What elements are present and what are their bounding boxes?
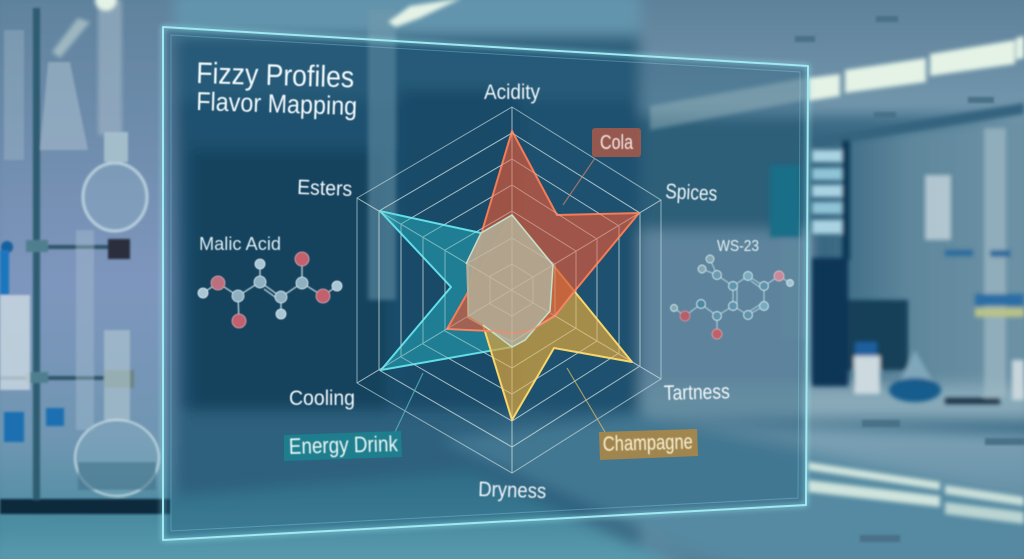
callout: energy drink: [284, 373, 423, 461]
callout: cola: [563, 128, 641, 205]
series: cola: [447, 131, 639, 333]
series overlap: [466, 215, 553, 347]
axis labels: Spices: [665, 180, 718, 206]
axis labels: Esters: [297, 176, 353, 201]
axis labels: Acidity: [484, 81, 540, 104]
axis labels: [289, 81, 730, 503]
radar chart: [357, 107, 661, 473]
axis labels: Cooling: [289, 387, 355, 410]
title: Fizzy Profiles: [196, 57, 355, 94]
chart grid: [357, 107, 661, 473]
callout: champagne: Champagne: [603, 431, 693, 456]
callout: champagne: [567, 368, 698, 460]
cabinet handles: [795, 16, 1024, 542]
molecule: WS-23: WS-23: [717, 238, 759, 255]
title: [196, 57, 358, 121]
molecule: malic acid: [198, 234, 342, 328]
title: Flavor Mapping: [196, 86, 358, 121]
molecule: WS-23: [670, 238, 794, 339]
callout: energy drink: Energy Drink: [288, 431, 399, 459]
molecule: malic acid: Malic Acid: [199, 234, 281, 254]
axis labels: Dryness: [478, 478, 547, 503]
background: lab stand and glassware: [0, 8, 170, 514]
series: energy drink: [380, 211, 553, 370]
series: champagne: [468, 215, 632, 420]
blurred columns and dark shapes: [98, 0, 1024, 404]
axis labels: Tartness: [664, 380, 730, 405]
callout: cola: Cola: [600, 132, 634, 154]
panel: glass panel frame: [163, 27, 808, 540]
